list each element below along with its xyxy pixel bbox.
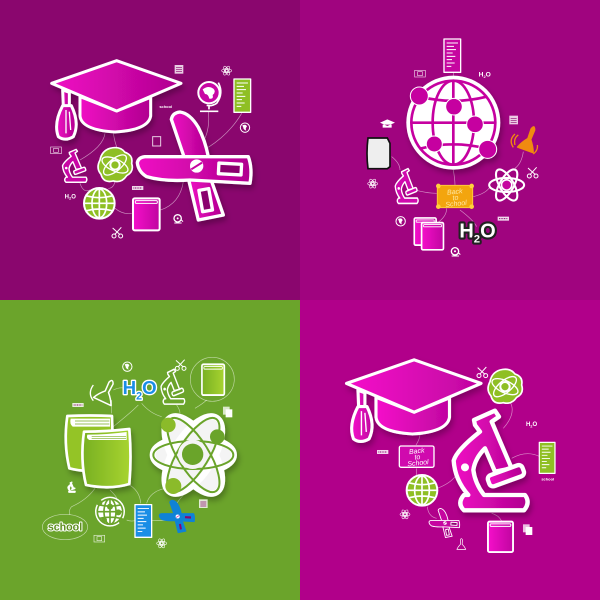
panel: graduation cap and scissors group bbox=[51, 61, 251, 238]
small cross scissors bbox=[429, 508, 460, 538]
small documents bbox=[223, 407, 232, 417]
book bbox=[133, 198, 160, 230]
small documents bbox=[523, 524, 532, 535]
small scissors bbox=[527, 167, 538, 178]
back to school sign bbox=[436, 184, 474, 209]
book bbox=[488, 522, 513, 552]
microscope bbox=[395, 169, 418, 203]
school badge bbox=[42, 514, 88, 540]
microscope bbox=[161, 369, 185, 404]
H2O label: O bbox=[533, 422, 538, 428]
small film frame bbox=[94, 535, 105, 542]
small calendar bbox=[175, 65, 183, 74]
H2O label: H bbox=[479, 71, 483, 78]
double books bbox=[414, 218, 443, 250]
scissors bbox=[137, 112, 251, 220]
green ruler bbox=[234, 79, 251, 112]
white bell bbox=[90, 377, 121, 406]
white book bbox=[367, 138, 390, 169]
H2O big label: H bbox=[459, 220, 474, 242]
graduation cap bbox=[52, 61, 181, 139]
blue ruler bbox=[135, 505, 152, 537]
small webcam bbox=[451, 248, 460, 256]
desk globe bbox=[198, 82, 221, 111]
small film frame bbox=[51, 147, 61, 154]
small tape bbox=[132, 186, 143, 190]
school label: school bbox=[159, 104, 172, 109]
small calendar bbox=[509, 116, 518, 124]
tiny microscope bbox=[67, 482, 76, 493]
small calendar bbox=[199, 499, 208, 508]
small atom bbox=[222, 65, 232, 76]
H2O label: O bbox=[486, 71, 491, 78]
panel: globe group bbox=[367, 39, 542, 256]
globe sticker bbox=[95, 497, 125, 527]
small webcam bbox=[174, 215, 183, 223]
small atom bbox=[368, 178, 378, 189]
H2O big label: 2 bbox=[474, 234, 480, 246]
graduation cap bbox=[347, 360, 481, 441]
small scissors bbox=[112, 227, 123, 238]
school label: school bbox=[541, 477, 554, 482]
ruler bbox=[444, 39, 461, 72]
circle around book bbox=[190, 357, 234, 401]
H2O label: O bbox=[71, 194, 76, 200]
H2O big label: O bbox=[480, 220, 496, 242]
panel: top left background bbox=[0, 0, 300, 300]
small atom bbox=[157, 538, 167, 549]
big double books bbox=[66, 415, 130, 487]
H2O blue label: O bbox=[142, 377, 157, 398]
big microscope bbox=[454, 411, 528, 510]
globe sticker bbox=[407, 475, 437, 506]
atom bbox=[489, 166, 524, 204]
small cap bbox=[380, 119, 395, 128]
panel: bottom left background bbox=[0, 300, 300, 600]
big atom bbox=[153, 407, 234, 503]
globe with nodes bbox=[406, 76, 500, 170]
atom sticker bbox=[488, 369, 522, 403]
back to school sign: School bbox=[445, 200, 468, 209]
orange bell bbox=[511, 124, 542, 154]
H2O label: 2 bbox=[483, 74, 486, 79]
small scissors bbox=[477, 367, 488, 378]
small earth bbox=[123, 362, 132, 371]
globe sticker bbox=[84, 188, 115, 219]
H2O label: H bbox=[526, 422, 530, 428]
small earth bbox=[396, 217, 405, 226]
film frame bbox=[415, 70, 425, 77]
panel: top right background bbox=[300, 0, 600, 300]
panel: cap and microscope group bbox=[347, 360, 555, 552]
back to school sign bbox=[399, 446, 434, 468]
microscope bbox=[63, 149, 87, 182]
H2O label: 2 bbox=[69, 196, 72, 201]
small earth bbox=[240, 123, 250, 132]
small tape bbox=[72, 403, 84, 407]
H2O blue label: H bbox=[123, 377, 136, 398]
back to school sign: to bbox=[452, 195, 459, 202]
small atom bbox=[400, 509, 410, 520]
small tape bbox=[498, 217, 509, 221]
panel: bottom right background bbox=[300, 300, 600, 600]
green ruler bbox=[539, 442, 555, 473]
back to school sign: Back bbox=[447, 188, 463, 197]
H2O label: 2 bbox=[530, 423, 533, 428]
small notebook bbox=[153, 137, 161, 146]
back to school sign: Back bbox=[409, 447, 425, 456]
school badge: school bbox=[48, 522, 82, 534]
small scissors bbox=[175, 360, 186, 370]
panel: books and atom group bbox=[42, 357, 234, 549]
blue scissors bbox=[159, 500, 194, 533]
back to school sign: School bbox=[407, 459, 430, 468]
back to school sign: to bbox=[414, 454, 421, 462]
small bell bbox=[457, 539, 466, 549]
atom sticker bbox=[98, 148, 132, 182]
book in circle bbox=[202, 364, 224, 395]
small tape bbox=[377, 450, 388, 454]
H2O blue label: 2 bbox=[136, 390, 142, 402]
H2O label: H bbox=[65, 194, 69, 200]
